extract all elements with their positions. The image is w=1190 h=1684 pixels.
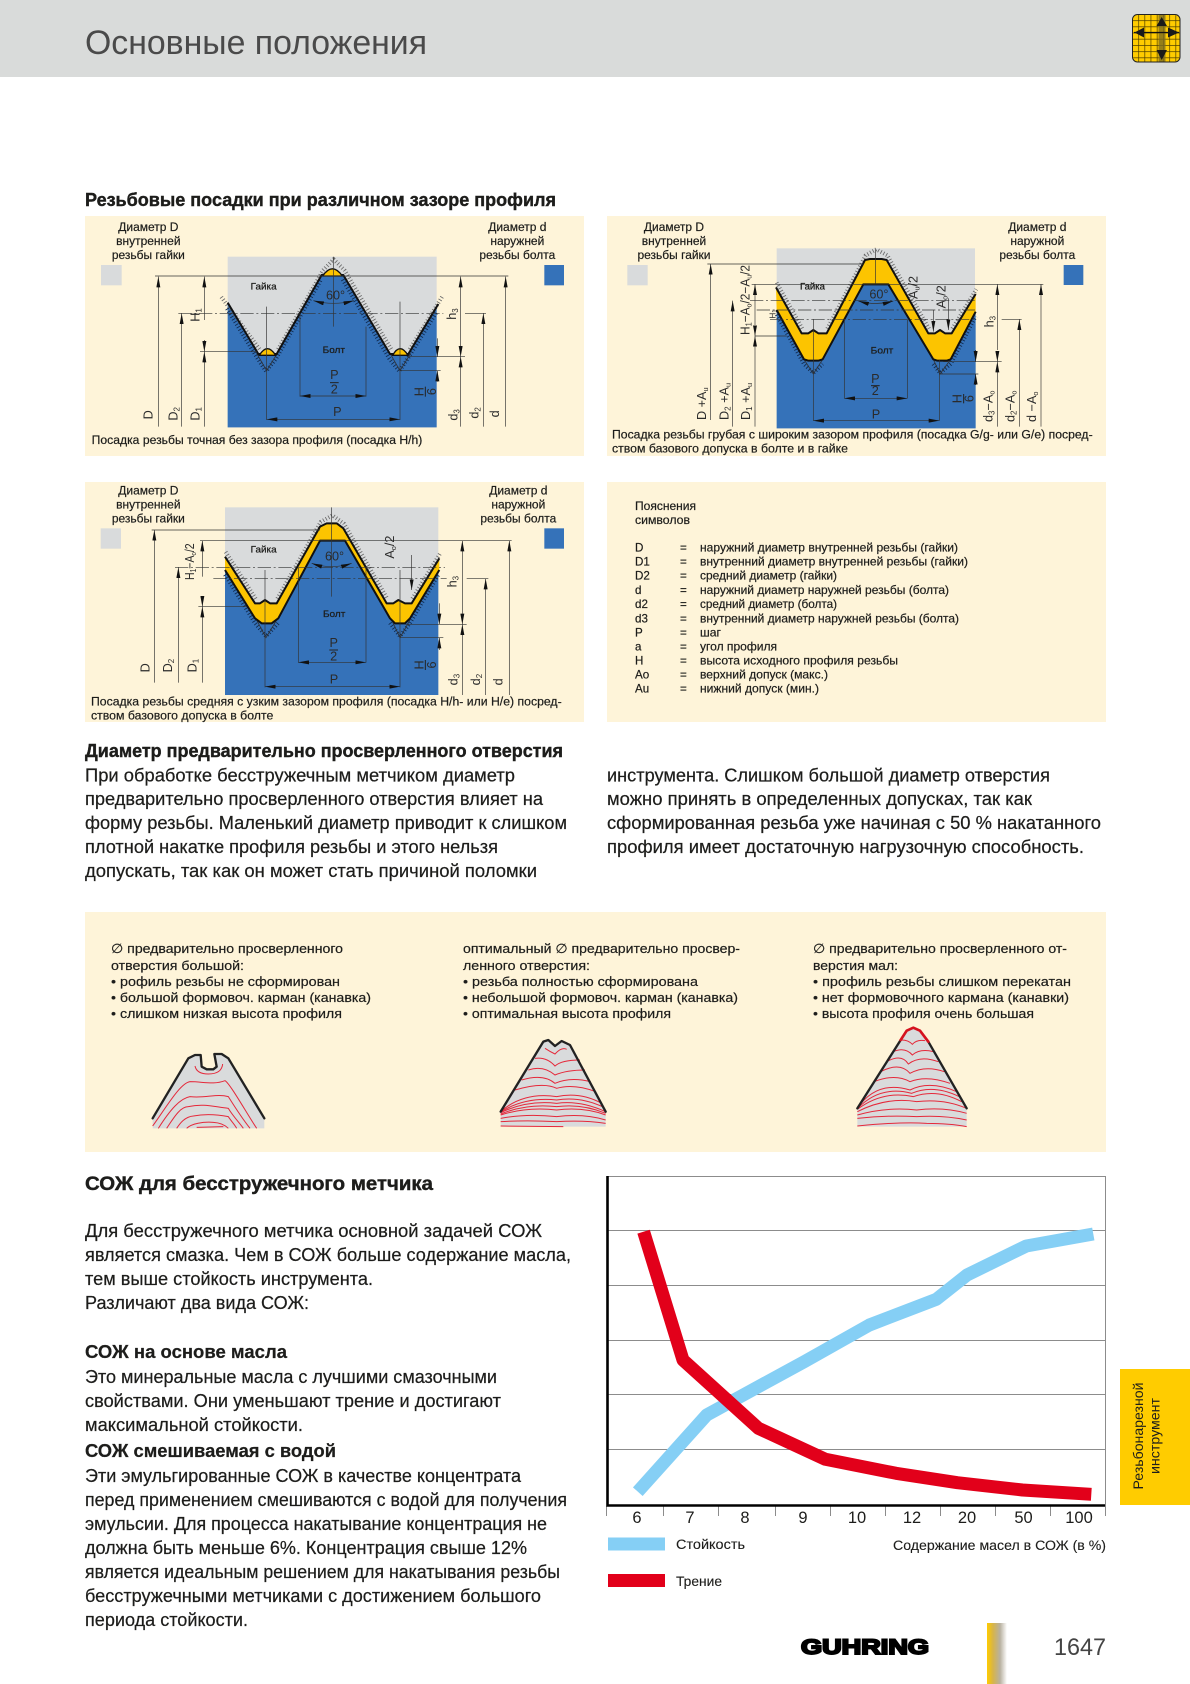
dimension labels: D <box>186 663 200 672</box>
dimension labels: 2 <box>723 406 732 411</box>
legend descriptions: внутренний диаметр внутренней резьбы (гайки) <box>700 555 968 568</box>
dimension labels: d −A <box>1025 396 1039 422</box>
legend symbols: d3 <box>635 612 648 625</box>
legend: nut diameter: Диаметр D <box>118 484 179 498</box>
side tab: threading tools <box>1120 1369 1190 1505</box>
dimension labels: −A <box>738 307 752 322</box>
dimension labels: o <box>744 304 753 307</box>
legend descriptions: наружний диаметр внутренней резьбы (гайки) <box>700 541 958 554</box>
text: hole optimal: • небольшой формовоч. карман (канавка) <box>463 990 738 1005</box>
dimension labels: h <box>982 320 996 327</box>
legend: nut diameter <box>627 220 711 285</box>
dimension labels: +A <box>717 386 731 406</box>
dimension labels: 1 <box>194 308 203 313</box>
text: hole too small: • профиль резьбы слишком перекатан <box>813 974 1071 989</box>
panel: loose fit diagram <box>607 216 1106 456</box>
dimension labels: o <box>988 391 997 395</box>
legend equals signs: = <box>680 668 687 681</box>
text block: water-miscible coolant <box>85 1441 567 1630</box>
dimension labels: /2 <box>906 276 920 286</box>
legend equals signs: = <box>680 555 687 568</box>
x axis numbers: 100 <box>1065 1509 1093 1527</box>
text block: hole diameter left column: плотной накатке профиля резьбы и этого нельзя <box>85 837 498 857</box>
legend descriptions: угол профиля <box>700 640 777 653</box>
panel: symbol legend <box>607 482 1106 722</box>
legend: friction <box>608 1574 722 1589</box>
icon: yellow grid with arrows <box>1132 14 1180 62</box>
legend symbols: a <box>635 640 642 653</box>
text block: water-miscible coolant: Эти эмульгированные СОЖ в качестве концентрата <box>85 1466 522 1486</box>
dimension labels: 3 <box>988 410 997 415</box>
dimension labels: 3 <box>453 673 462 678</box>
dimension labels: Болт <box>871 345 893 355</box>
side tab: threading tools: Резьбонарезной <box>1130 1382 1146 1490</box>
dimension labels: 1 <box>745 406 754 411</box>
text block: coolant intro: Различают два вида СОЖ: <box>85 1293 309 1313</box>
dimension labels: d <box>446 414 460 421</box>
text block: coolant intro: Для бесстружечного метчика основной задачей СОЖ <box>85 1221 542 1241</box>
thread profile: large hole <box>153 1054 264 1128</box>
dimension labels: d <box>468 412 482 419</box>
x axis numbers: 6 <box>632 1509 642 1527</box>
legend: nut diameter: Диаметр D <box>644 220 704 234</box>
text block: hole diameter left column: форму резьбы. Маленький диаметр приводит к слишком <box>85 813 567 833</box>
dimension labels: A <box>934 300 948 308</box>
dimension labels: H <box>738 326 752 335</box>
panel: exact fit diagram <box>85 216 584 456</box>
dimension labels: u <box>744 275 753 279</box>
legend descriptions: шаг <box>700 626 721 639</box>
dimension labels: H <box>412 387 426 396</box>
text: hole optimal <box>463 941 740 1021</box>
legend: bolt diameter: Диаметр d <box>488 220 546 234</box>
legend heading: Пояснения <box>635 500 696 513</box>
caption: Посадка резьбы грубая с широким зазором профиля (посадка G/g- или G/e) посред- <box>612 428 1093 442</box>
dimension labels: H <box>183 571 197 580</box>
legend descriptions: верхний допуск (макс.) <box>700 668 828 681</box>
text: hole optimal: • оптимальная высота профиля <box>463 1006 671 1021</box>
caption <box>612 428 1093 455</box>
legend: bolt diameter: Диаметр d <box>489 484 547 498</box>
legend: bolt diameter: наружней <box>490 234 544 248</box>
dimension labels: Гайка <box>251 545 277 555</box>
caption: ством базового допуска в болте и в гайке <box>612 441 848 455</box>
legend symbols: d <box>635 584 641 597</box>
legend symbols: D2 <box>635 569 650 582</box>
text: hole optimal: • резьба полностью сформирована <box>463 974 699 989</box>
side tab: threading tools: инструмент <box>1146 1397 1162 1474</box>
logo: GUHRING: GUHRING <box>801 1636 929 1659</box>
text block: hole diameter right column: можно принять в определенных допусках, так как <box>607 789 1032 809</box>
legend: nut diameter: Диаметр D <box>118 220 179 234</box>
legend: bolt diameter: резьбы болта <box>479 248 556 262</box>
dimension labels: /2−A <box>738 278 752 304</box>
section heading: thread fits: Резьбовые посадки при различном зазоре профиля <box>85 190 556 210</box>
text block: water-miscible coolant: является идеальным решением для накатывания резьбы <box>85 1562 560 1582</box>
legend descriptions: средний диаметр (болта) <box>700 598 837 611</box>
panel: medium fit diagram <box>85 482 584 722</box>
dimension labels: P <box>333 405 342 419</box>
chart grid <box>606 1176 1106 1516</box>
text: hole too small: ∅ предварительно просверленного от- <box>813 941 1067 956</box>
legend equals signs: = <box>680 640 687 653</box>
legend: bolt diameter: резьбы болта <box>999 248 1076 262</box>
text: hole too small: • высота профиля очень большая <box>813 1006 1034 1021</box>
text: hole too large: отверстия большой: <box>111 958 244 973</box>
caption <box>91 695 562 722</box>
dimension labels: o <box>389 546 398 550</box>
legend descriptions: нижний допуск (мин.) <box>700 682 819 695</box>
dimension labels: H <box>951 394 965 403</box>
text block: hole diameter right column: инструмента. Слишком большой диаметр отверстия <box>607 766 1050 786</box>
dimension labels: D <box>142 410 156 419</box>
dimension labels: Гайка <box>251 281 277 291</box>
legend equals signs: = <box>680 541 687 554</box>
legend: nut diameter: резьбы гайки <box>112 511 185 525</box>
thread profile: optimal hole <box>501 1040 606 1127</box>
heading: pre-drilled hole diameter: Диаметр предварительно просверленного отверстия <box>85 741 563 761</box>
dimension labels: u <box>701 387 710 391</box>
dimension labels: 1 <box>189 568 198 572</box>
dimension labels: h <box>446 580 460 587</box>
dimension labels: 1 <box>773 309 779 313</box>
dimension labels: +A <box>739 386 753 406</box>
dimension labels: 6 <box>425 388 439 395</box>
legend: bolt diameter: наружной <box>491 497 545 511</box>
dimension labels: H <box>412 660 426 670</box>
dimension labels: 2 <box>474 407 483 412</box>
text block: oil-based coolant: свойствами. Они уменьшают трение и достигают <box>85 1391 501 1411</box>
chart axes <box>608 1176 1105 1506</box>
legend symbols: D <box>635 541 643 554</box>
x axis numbers: 9 <box>798 1509 808 1527</box>
dimension labels: D <box>166 412 180 421</box>
dimension labels: u <box>723 383 732 387</box>
dimension labels: D +A <box>695 391 709 420</box>
dimension labels: 1 <box>192 658 201 663</box>
dimension labels: u <box>912 286 921 291</box>
legend: tool life <box>608 1537 745 1552</box>
legend equals signs: = <box>680 569 687 582</box>
text block: hole diameter left column: допускать, так как он может стать причиной поломки <box>85 861 537 881</box>
dimension labels: P <box>330 673 338 687</box>
legend equals signs: = <box>680 654 687 667</box>
legend heading: символов <box>635 514 690 527</box>
dimension labels: P <box>329 636 338 650</box>
x axis title: Содержание масел в СОЖ (в %) <box>893 1538 1106 1553</box>
dimension labels: P <box>330 368 339 382</box>
dimension labels <box>142 281 502 421</box>
legend: nut diameter: резьбы гайки <box>112 248 185 262</box>
dimension labels: 2 <box>475 673 484 678</box>
text block: water-miscible coolant: должна быть меньше 6%. Концентрация свыше 12% <box>85 1538 527 1558</box>
nut and bolt profile <box>225 507 440 695</box>
legend equals signs: = <box>680 682 687 695</box>
dimension labels: 6 <box>962 395 976 402</box>
dimension labels: d <box>492 678 506 685</box>
dimension labels: d <box>488 410 502 417</box>
x axis numbers <box>632 1509 1093 1527</box>
text block: oil-based coolant <box>85 1342 501 1435</box>
dimension lines <box>152 507 512 695</box>
legend symbols: d2 <box>635 598 648 611</box>
dimension labels: 1 <box>744 322 753 326</box>
text block: water-miscible coolant: бесстружечными метчиками с достижением большого <box>85 1586 541 1606</box>
text block: hole diameter left column <box>85 766 567 881</box>
legend: bolt diameter: Диаметр d <box>1008 220 1066 234</box>
text block: oil-based coolant: максимальной стойкости. <box>85 1415 303 1435</box>
dimension labels: A <box>906 291 920 299</box>
dimension labels: H <box>768 313 777 319</box>
dimension labels: D <box>717 411 731 420</box>
legend descriptions: средний диаметр (гайки) <box>700 569 837 582</box>
panel: thread forming results <box>85 912 1106 1152</box>
thread profile: small hole <box>857 1028 967 1127</box>
page number: 1647 <box>1054 1634 1106 1661</box>
dimension labels: 60° <box>326 288 345 302</box>
text block: water-miscible coolant: периода стойкости. <box>85 1610 248 1630</box>
dimension labels: 3 <box>452 409 461 414</box>
dimension labels <box>138 536 506 687</box>
dimension labels: 3 <box>451 308 460 313</box>
dimension labels: −A <box>183 555 197 569</box>
dimension labels: o <box>940 296 949 300</box>
dimension labels: /2 <box>183 543 197 552</box>
dimension labels: 2 <box>1009 410 1018 415</box>
dimension labels: D <box>188 412 202 421</box>
text block: hole diameter right column: профиля имеет достаточную нагрузочную способность. <box>607 837 1084 857</box>
line chart: tool life and friction vs oil content <box>606 1176 1106 1589</box>
dimension labels: 60° <box>325 550 344 564</box>
x axis numbers: 7 <box>685 1509 695 1527</box>
dimension labels: 2 <box>330 650 337 664</box>
text: hole too large: • рофиль резьбы не сформирован <box>111 974 340 989</box>
legend: nut diameter: внутренней <box>116 234 181 248</box>
caption: Посадка резьбы средняя с узким зазором профиля (посадка H/h- или H/e) посред- <box>91 695 562 709</box>
dimension labels: d <box>469 678 483 685</box>
text: hole optimal: оптимальный ∅ предварительно просвер- <box>463 941 740 956</box>
dimension labels: Гайка <box>800 282 825 292</box>
dimension labels: o <box>189 552 198 556</box>
legend: bolt diameter <box>999 220 1083 285</box>
dimension labels: Болт <box>323 609 345 619</box>
legend descriptions: наружний диаметр наружней резьбы (болта) <box>700 584 949 597</box>
legend equals signs: = <box>680 584 687 597</box>
text: hole too small: верстия мал: <box>813 958 898 973</box>
text block: oil-based coolant: СОЖ на основе масла <box>85 1342 288 1362</box>
dimension labels: d <box>447 678 461 685</box>
text block: coolant intro: является смазка. Чем в СОЖ больше содержание масла, <box>85 1245 571 1265</box>
text block: water-miscible coolant: эмульсии. Для процесса накатывание концентрация не <box>85 1514 547 1534</box>
text block: coolant intro <box>85 1221 571 1313</box>
legend symbols: Au <box>635 682 649 695</box>
text block: hole diameter left column: предварительно просверленного отверстия влияет на <box>85 789 544 809</box>
page title: Основные положения <box>85 24 427 62</box>
legend: nut diameter: внутренней <box>642 234 706 248</box>
text: hole too large <box>111 941 371 1021</box>
dimension labels: D <box>161 663 175 672</box>
dimension labels: 2 <box>872 384 879 398</box>
legend: bolt diameter <box>480 484 564 549</box>
text block: hole diameter left column: При обработке бесстружечным метчиком диаметр <box>85 766 515 786</box>
legend descriptions: высота исходного профиля резьбы <box>700 654 898 667</box>
dimension labels: −A <box>982 394 996 410</box>
legend heading <box>635 500 696 527</box>
dimension labels: 2 <box>172 407 181 412</box>
dimension labels: 60° <box>869 288 888 302</box>
legend: tool life: Стойкость <box>676 1537 745 1552</box>
dimension labels: h <box>445 313 459 320</box>
dimension labels: /2 <box>738 265 752 275</box>
text block: coolant intro: тем выше стойкость инструмента. <box>85 1269 373 1289</box>
footer accent bar <box>987 1623 1007 1684</box>
x axis numbers: 8 <box>740 1509 750 1527</box>
dimension labels: u <box>745 383 754 387</box>
dimension labels: o <box>1009 391 1018 395</box>
dimension labels: 2 <box>167 658 176 663</box>
dimension labels: Болт <box>323 345 345 355</box>
legend equals signs: = <box>680 626 687 639</box>
dimension labels: o <box>1031 392 1040 396</box>
nut and bolt profile <box>221 257 443 427</box>
nut and bolt profile <box>776 248 976 428</box>
legend: friction: Трение <box>676 1574 722 1589</box>
x axis numbers: 20 <box>958 1509 976 1527</box>
dimension labels: D <box>739 411 753 420</box>
text: hole optimal: ленного отверстия: <box>463 958 590 973</box>
legend: bolt diameter: резьбы болта <box>480 511 557 525</box>
legend equals signs <box>680 541 687 695</box>
text block: hole diameter right column: сформированная резьба уже начиная с 50 % накатанного <box>607 813 1101 833</box>
dimension labels: /2 <box>383 536 397 546</box>
legend symbols: P <box>635 626 643 639</box>
legend descriptions: внутренний диаметр наружней резьбы (болта) <box>700 612 959 625</box>
x axis numbers: 12 <box>903 1509 921 1527</box>
dimension labels: 3 <box>988 315 997 320</box>
x axis numbers: 10 <box>848 1509 866 1527</box>
text block: oil-based coolant: Это минеральные масла с лучшими смазочными <box>85 1367 497 1387</box>
legend symbols <box>635 541 650 695</box>
dimension labels: 1 <box>194 407 203 412</box>
legend equals signs: = <box>680 612 687 625</box>
legend: bolt diameter <box>479 220 564 285</box>
dimension lines <box>155 257 508 427</box>
heading: coolant for forming taps: СОЖ для бесстружечного метчика <box>85 1174 433 1195</box>
legend symbols: H <box>635 654 643 667</box>
dimension labels: P <box>872 408 880 422</box>
dimension labels: 3 <box>452 575 461 580</box>
caption: Посадка резьбы точная без зазора профиля (посадка H/h) <box>92 433 422 447</box>
text block: hole diameter right column <box>607 766 1101 857</box>
dimension labels <box>695 265 1040 422</box>
caption: ством базового допуска в болте <box>91 708 274 722</box>
dimension labels: H <box>188 313 202 322</box>
legend: nut diameter <box>101 220 185 285</box>
text block: water-miscible coolant: СОЖ смешиваемая с водой <box>85 1441 336 1461</box>
legend symbols: Ao <box>635 668 649 681</box>
dimension labels: 6 <box>425 661 439 669</box>
dimension lines <box>707 249 1043 427</box>
dimension labels: A <box>383 550 397 559</box>
legend symbols: D1 <box>635 555 650 568</box>
text: hole too large: ∅ предварительно просверленного <box>111 941 343 956</box>
series: friction <box>644 1232 1091 1494</box>
dimension labels: 2 <box>331 382 338 396</box>
dimension labels: −A <box>1003 394 1017 410</box>
legend: nut diameter: резьбы гайки <box>637 248 711 262</box>
text: hole too large: • большой формовоч. карман (канавка) <box>111 990 371 1005</box>
header band <box>0 0 1190 77</box>
dimension labels: /2 <box>934 285 948 296</box>
text: hole too small: • нет формовочного кармана (канавки) <box>813 990 1069 1005</box>
dimension labels: d <box>1003 415 1017 422</box>
legend: bolt diameter: наружной <box>1010 234 1064 248</box>
dimension labels: d <box>982 415 996 422</box>
dimension labels: P <box>871 372 880 386</box>
series: tool life <box>638 1234 1093 1492</box>
legend: nut diameter <box>101 484 185 549</box>
legend descriptions <box>700 541 968 695</box>
text: hole too large: • слишком низкая высота профиля <box>111 1006 342 1021</box>
x axis numbers: 50 <box>1014 1509 1033 1527</box>
dimension labels: D <box>138 663 152 672</box>
text block: water-miscible coolant: перед применением смешиваются с водой для получения <box>85 1490 567 1510</box>
text: hole too small <box>813 941 1071 1021</box>
legend equals signs: = <box>680 598 687 611</box>
legend: nut diameter: внутренней <box>116 497 181 511</box>
